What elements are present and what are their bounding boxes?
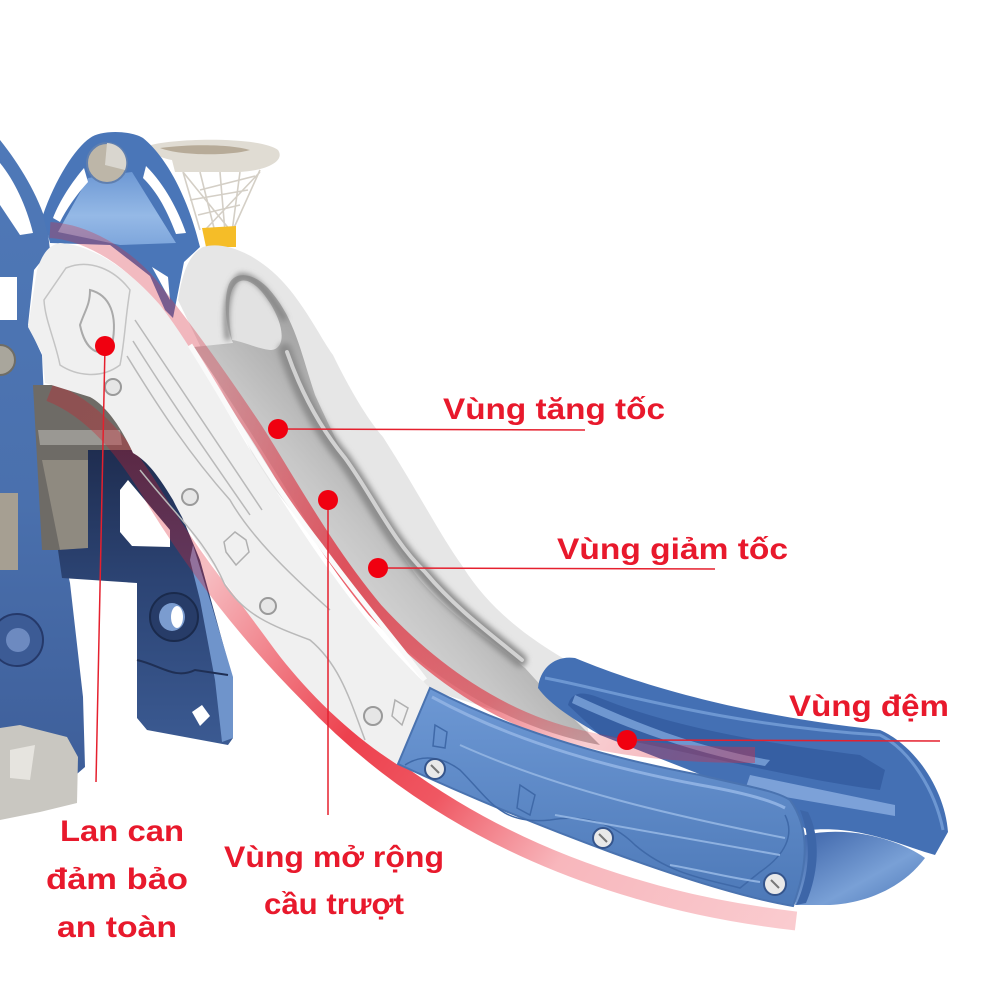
callout: Lan can đảm bảo an toàn: Lan can xyxy=(60,815,184,848)
callout: Vùng tăng tốc xyxy=(268,393,665,439)
slide far blue end xyxy=(538,658,948,905)
callout: Vùng mở rộng cầu trượt: Vùng mở rộng xyxy=(224,841,444,874)
red curve band: lower xyxy=(50,392,796,921)
callout: Vùng đệm: Vùng đệm xyxy=(789,690,949,723)
basketball hoop xyxy=(148,140,280,247)
callout: Vùng giảm tốc xyxy=(368,533,788,578)
callout: Vùng giảm tốc: Vùng giảm tốc xyxy=(557,533,788,566)
icon: blue rail screws xyxy=(425,759,786,895)
callout: Vùng mở rộng cầu trượt xyxy=(224,490,444,921)
play tower xyxy=(0,140,233,820)
arch support xyxy=(43,132,200,318)
callout: Vùng tăng tốc: Vùng tăng tốc xyxy=(443,393,665,426)
slide front white rail xyxy=(28,243,430,765)
slide grey channel xyxy=(194,275,600,745)
callout: Vùng mở rộng cầu trượt: cầu trượt xyxy=(264,888,404,921)
callout: Lan can đảm bảo an toàn: an toàn xyxy=(57,911,177,944)
callout: Vùng đệm xyxy=(617,690,949,750)
red curve band: upper xyxy=(50,230,755,755)
callout: Lan can đảm bảo an toàn: đảm bảo xyxy=(46,863,188,896)
icon: rail screws xyxy=(105,379,382,725)
slide front blue rail xyxy=(398,688,817,906)
callout: Lan can đảm bảo an toàn xyxy=(46,336,188,944)
slide far rail xyxy=(178,245,590,740)
